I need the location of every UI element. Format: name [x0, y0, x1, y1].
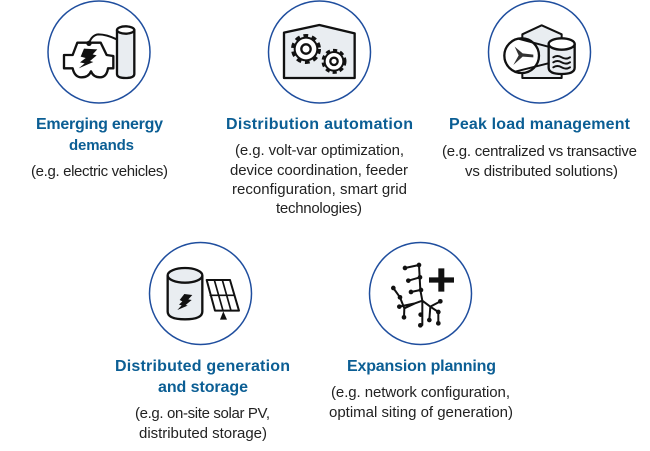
description: (e.g. on-site solar PV,: [135, 405, 270, 422]
description: [442, 143, 637, 180]
panel: distributed generation and storage: [115, 242, 290, 442]
heading: [115, 358, 290, 396]
description: (e.g. network configuration,: [331, 384, 510, 401]
heading: demands: [69, 137, 134, 154]
icon: gears in building: [268, 1, 370, 103]
panel: peak load management: [442, 1, 637, 180]
description: distributed storage): [139, 425, 267, 442]
description: (e.g. volt-var optimization,: [235, 142, 404, 159]
heading: and storage: [158, 379, 248, 396]
icon: battery and solar panel: [150, 242, 252, 344]
heading: Distribution automation: [226, 116, 413, 133]
description: reconfiguration, smart grid: [232, 181, 407, 198]
icon: network tree with plus: [370, 242, 472, 344]
heading: [36, 116, 163, 154]
description: technologies): [276, 200, 362, 217]
panel: distribution automation: [226, 1, 413, 217]
description: [135, 405, 270, 442]
description: device coordination, feeder: [230, 162, 408, 179]
description: optimal siting of generation): [329, 404, 513, 421]
description: (e.g. electric vehicles): [31, 163, 168, 180]
description: (e.g. centralized vs transactive: [442, 143, 637, 160]
description: [230, 142, 408, 217]
icon: car charging from battery: [48, 1, 150, 103]
heading: Expansion planning: [347, 358, 496, 375]
panel: emerging energy demands: [31, 1, 168, 180]
panel: expansion planning: [329, 242, 513, 421]
description: vs distributed solutions): [465, 163, 618, 180]
heading: Peak load management: [449, 116, 631, 133]
heading: Emerging energy: [36, 116, 163, 133]
icon: wind turbine and water storage: [488, 1, 590, 103]
heading: Distributed generation: [115, 358, 290, 375]
description: [329, 384, 513, 421]
